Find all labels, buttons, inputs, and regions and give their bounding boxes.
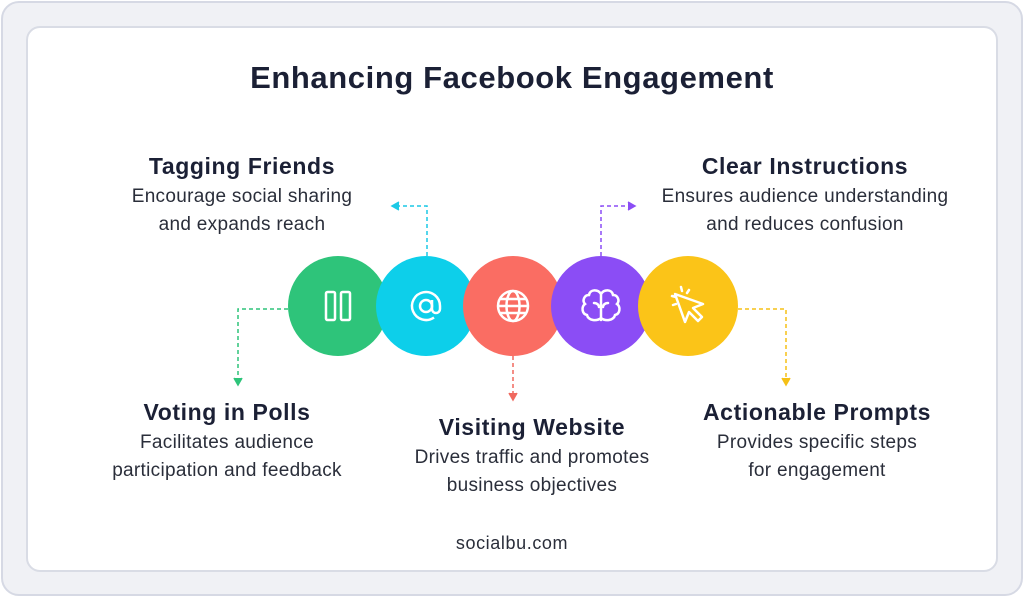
text: voting in polls: Voting in Polls: [143, 399, 310, 425]
circle: globe: [463, 256, 563, 356]
text: tagging friends: Encourage social sharing: [132, 186, 352, 207]
text: visiting website: Visiting Website: [439, 414, 625, 440]
text: actionable prompts: Provides specific steps: [717, 432, 917, 453]
connector: website: [509, 356, 517, 400]
text: tagging friends: Tagging Friends: [149, 153, 335, 179]
text: actionable prompts: [703, 399, 931, 481]
text: clear instructions: Clear Instructions: [702, 153, 908, 179]
title: Enhancing Facebook Engagement: [250, 60, 774, 95]
connector: tagging: [392, 202, 427, 256]
text: actionable prompts: for engagement: [748, 460, 886, 481]
text: tagging friends: [132, 153, 352, 235]
circle: at: [376, 256, 476, 356]
connector: clear: [601, 202, 635, 256]
text: clear instructions: Ensures audience understanding: [662, 186, 948, 207]
text: visiting website: Drives traffic and promotes: [415, 447, 649, 468]
text: visiting website: [415, 414, 649, 496]
connector: prompts: [738, 309, 790, 385]
text: clear instructions: [662, 153, 948, 235]
text: voting in polls: participation and feedback: [112, 460, 342, 481]
text: tagging friends: and expands reach: [159, 214, 325, 235]
footer: socialbu.com: [456, 533, 568, 553]
connector: voting: [234, 309, 288, 385]
circle: polls: [288, 256, 388, 356]
circle: brain: [551, 256, 651, 356]
text: voting in polls: [112, 399, 342, 481]
text: visiting website: business objectives: [447, 475, 617, 496]
text: actionable prompts: Actionable Prompts: [703, 399, 931, 425]
text: clear instructions: and reduces confusion: [706, 214, 904, 235]
text: voting in polls: Facilitates audience: [140, 432, 314, 453]
circle: cursor: [638, 256, 738, 356]
